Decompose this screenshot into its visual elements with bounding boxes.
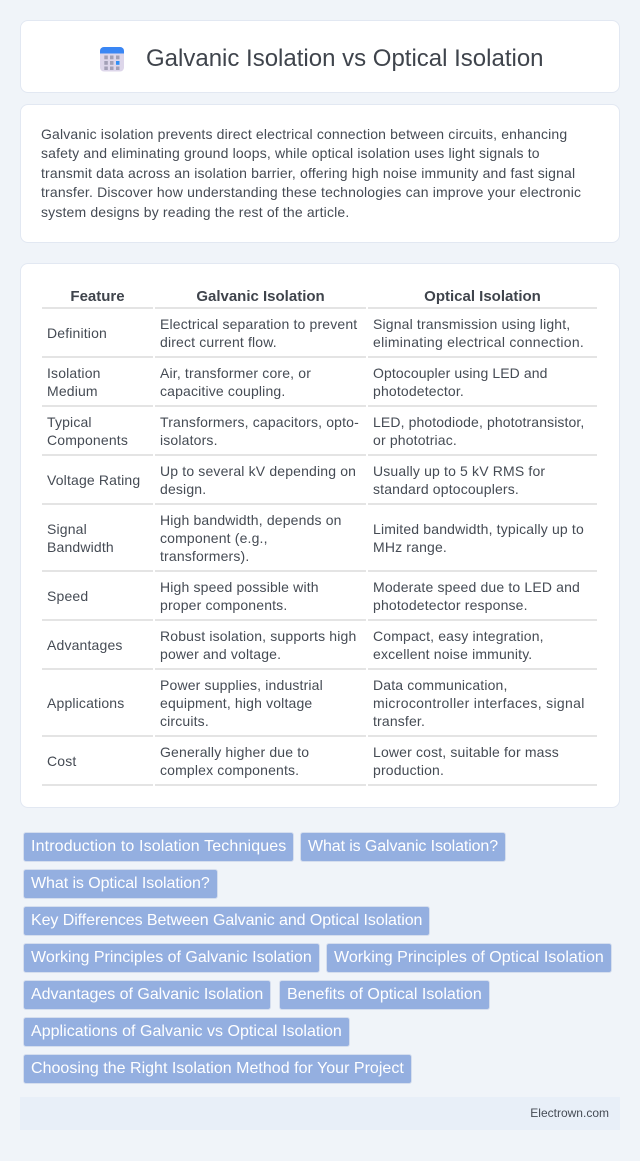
comparison table: Up to several kV depending on xyxy=(160,463,356,479)
comparison table: Voltage Rating xyxy=(47,472,140,488)
comparison table: Generally higher due to xyxy=(160,744,309,760)
footer xyxy=(20,1097,620,1130)
comparison table: or phototriac. xyxy=(373,432,457,448)
comparison table: circuits. xyxy=(160,713,209,729)
text block: introduction: safety and eliminating ground loops, while optical isolation uses light signals to xyxy=(41,145,540,161)
text block: introduction: Galvanic isolation prevents direct electrical connection between circuits, enhancing xyxy=(41,126,567,142)
title: Galvanic Isolation vs Optical Isolation xyxy=(146,45,544,72)
comparison table: Optical Isolation xyxy=(424,288,541,305)
topic tags: Advantages of Galvanic Isolation xyxy=(31,986,263,1003)
comparison table: Bandwidth xyxy=(47,539,114,555)
panel: header xyxy=(20,20,620,93)
comparison table: Typical xyxy=(47,414,92,430)
comparison table: capacitive coupling. xyxy=(160,383,285,399)
comparison table: Robust isolation, supports high xyxy=(160,628,356,644)
topic tags: What is Optical Isolation? xyxy=(31,875,210,892)
comparison table: High speed possible with xyxy=(160,579,319,595)
topic tags: What is Galvanic Isolation? xyxy=(308,838,498,855)
comparison table: component (e.g., xyxy=(160,530,268,546)
comparison table: photodetector. xyxy=(373,383,464,399)
comparison table xyxy=(42,288,597,786)
comparison table: Compact, easy integration, xyxy=(373,628,544,644)
comparison table: design. xyxy=(160,481,206,497)
comparison table: transfer. xyxy=(373,713,425,729)
comparison table: Cost xyxy=(47,753,76,769)
comparison table: isolators. xyxy=(160,432,218,448)
comparison table: Galvanic Isolation xyxy=(196,288,325,305)
comparison table: excellent noise immunity. xyxy=(373,646,532,662)
comparison table: microcontroller interfaces, signal xyxy=(373,695,585,711)
comparison table: photodetector response. xyxy=(373,597,528,613)
text block: introduction: transmit data across an isolation barrier, offering high noise immunity and fast signal xyxy=(41,165,575,181)
comparison table: proper components. xyxy=(160,597,287,613)
comparison table: transformers). xyxy=(160,548,249,564)
icon: calendar xyxy=(100,47,124,72)
topic tags: Introduction to Isolation Techniques xyxy=(31,838,286,855)
comparison table: Applications xyxy=(47,695,124,711)
comparison table: Transformers, capacitors, opto- xyxy=(160,414,359,430)
text block: introduction: transfer. Discover how understanding these technologies can improve your electronic xyxy=(41,184,581,200)
comparison table: Power supplies, industrial xyxy=(160,677,323,693)
topic tags: Applications of Galvanic vs Optical Isolation xyxy=(31,1023,342,1040)
topic tags: Choosing the Right Isolation Method for Your Project xyxy=(31,1060,404,1077)
panel: comparison table xyxy=(20,263,620,808)
comparison table: High bandwidth, depends on xyxy=(160,512,342,528)
topic tags: Benefits of Optical Isolation xyxy=(287,986,482,1003)
footer: Electrown.com xyxy=(530,1106,609,1120)
text block: introduction: system designs by reading the rest of the article. xyxy=(41,204,349,220)
comparison table: Lower cost, suitable for mass xyxy=(373,744,559,760)
comparison table: Speed xyxy=(47,588,88,604)
comparison table: Signal transmission using light, xyxy=(373,316,570,332)
comparison table: production. xyxy=(373,762,444,778)
comparison table: Signal xyxy=(47,521,87,537)
topic tags: Working Principles of Optical Isolation xyxy=(334,949,604,966)
comparison table: Air, transformer core, or xyxy=(160,365,311,381)
comparison table: standard optocouplers. xyxy=(373,481,519,497)
topic tags: Working Principles of Galvanic Isolation xyxy=(31,949,312,966)
topic tags xyxy=(23,832,612,1084)
comparison table: power and voltage. xyxy=(160,646,281,662)
comparison table: complex components. xyxy=(160,762,299,778)
comparison table: Isolation xyxy=(47,365,101,381)
comparison table: eliminating electrical connection. xyxy=(373,334,584,350)
comparison table: LED, photodiode, phototransistor, xyxy=(373,414,584,430)
topic tags: Key Differences Between Galvanic and Optical Isolation xyxy=(31,912,422,929)
comparison table: Electrical separation to prevent xyxy=(160,316,357,332)
comparison table: Feature xyxy=(70,288,125,305)
comparison table: Optocoupler using LED and xyxy=(373,365,548,381)
comparison table: Advantages xyxy=(47,637,123,653)
comparison table: direct current flow. xyxy=(160,334,277,350)
comparison table: equipment, high voltage xyxy=(160,695,312,711)
comparison table: Definition xyxy=(47,325,107,341)
comparison table: Moderate speed due to LED and xyxy=(373,579,580,595)
comparison table: Limited bandwidth, typically up to xyxy=(373,521,584,537)
comparison table: Usually up to 5 kV RMS for xyxy=(373,463,545,479)
comparison table: MHz range. xyxy=(373,539,447,555)
comparison table: Components xyxy=(47,432,128,448)
comparison table: Data communication, xyxy=(373,677,508,693)
panel: introduction xyxy=(20,104,620,243)
comparison table: Medium xyxy=(47,383,98,399)
text block: introduction xyxy=(41,126,581,220)
